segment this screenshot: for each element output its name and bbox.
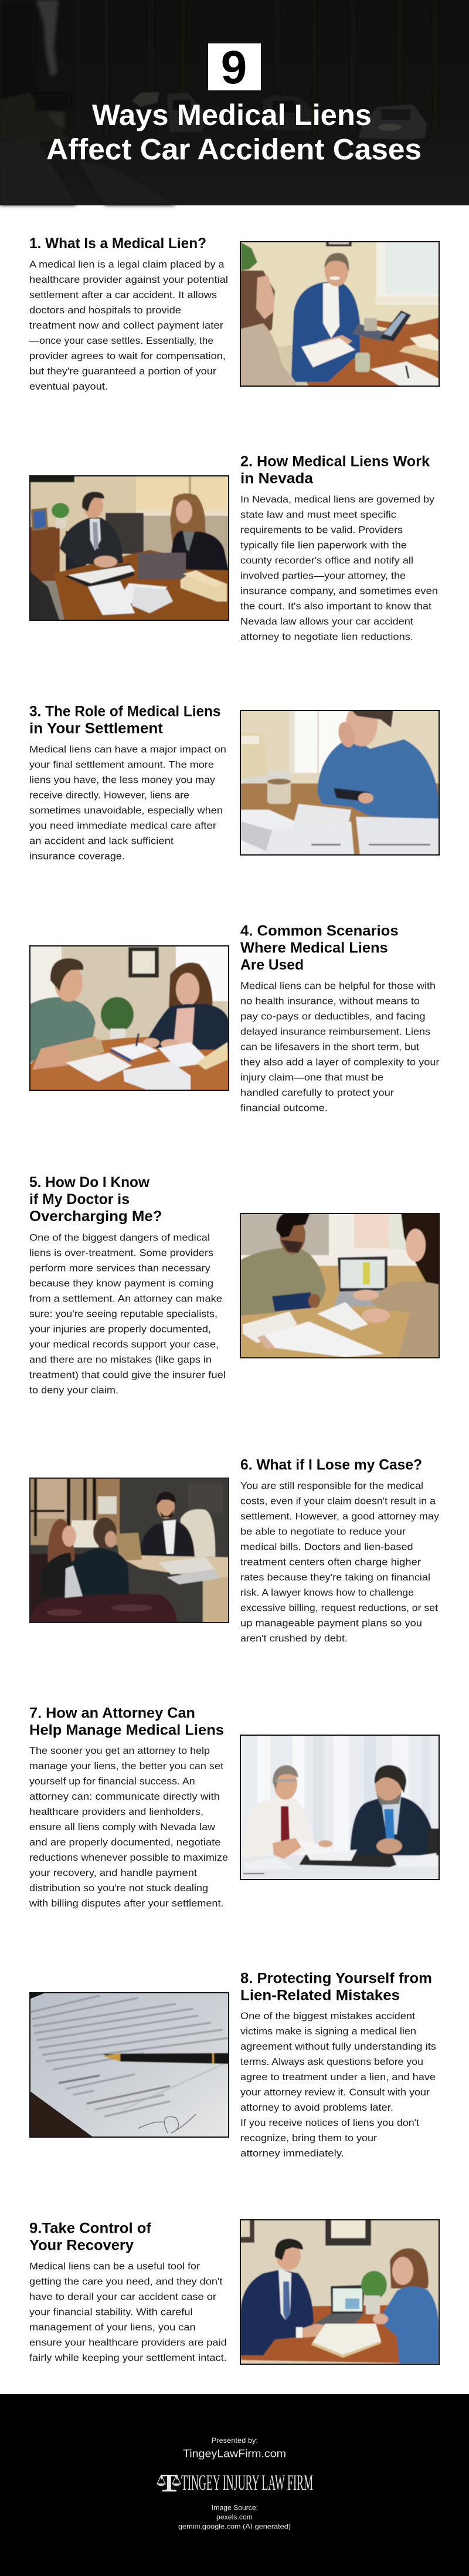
text block 6: up manageable payment plans so you bbox=[240, 1618, 422, 1629]
text block 1: doctors and hospitals to provide bbox=[29, 305, 181, 316]
logo: Tingey Injury Law Firm bbox=[157, 2469, 313, 2496]
text block 2: state law and must meet specific bbox=[240, 510, 396, 520]
heading 8: Lien-Related Mistakes bbox=[240, 1987, 400, 2004]
image sources: Image Source: bbox=[212, 2503, 258, 2511]
heading 9: 9.Take Control of bbox=[29, 2220, 152, 2237]
text block 7: with billing disputes after your settlement. bbox=[29, 1898, 224, 1909]
heading 7 bbox=[29, 1705, 224, 1739]
text block 5: One of the biggest dangers of medical bbox=[29, 1232, 210, 1243]
image sources: pexels.com bbox=[216, 2513, 253, 2521]
text block 1: —once your case settles. Essentially, the bbox=[29, 336, 213, 346]
heading 5 bbox=[29, 1174, 162, 1225]
panel: section 9 take control of your recovery bbox=[29, 2219, 440, 2365]
text block 9: ensure your healthcare providers are paid bbox=[29, 2338, 227, 2348]
photo: contract page with black pen and signature bbox=[29, 1992, 229, 2138]
footer: TINGEY INJURY LAW FIRM bbox=[181, 2471, 313, 2495]
text block 7: distribution so you're not stuck dealing bbox=[29, 1883, 208, 1894]
heading 5: Overcharging Me? bbox=[29, 1208, 162, 1225]
title: Affect Car Accident Cases bbox=[46, 133, 422, 165]
heading 4: Where Medical Liens bbox=[240, 940, 388, 956]
text block 9 bbox=[29, 2261, 227, 2364]
text block 5: your injuries are properly documented, bbox=[29, 1324, 211, 1334]
heading 7: 7. How an Attorney Can bbox=[29, 1705, 195, 1722]
text block 2: requirements to be valid. Providers bbox=[240, 525, 403, 536]
text block 3: insurance coverage. bbox=[29, 851, 125, 862]
text block 6: treatment centers often charge higher bbox=[240, 1557, 422, 1568]
heading 7: Help Manage Medical Liens bbox=[29, 1722, 224, 1739]
photo: couple meeting lawyer at office desk bbox=[29, 1478, 229, 1623]
text block 4: handled carefully to protect your bbox=[240, 1088, 395, 1098]
text block 4: they also add a layer of complexity to your bbox=[240, 1057, 440, 1068]
image sources: gemini.google.com (AI-generated) bbox=[178, 2522, 291, 2530]
text block 8: One of the biggest mistakes accident bbox=[240, 2011, 415, 2021]
text block 4: pay co-pays or deductibles, and facing bbox=[240, 1012, 426, 1022]
panel: section 4 common scenarios bbox=[29, 923, 440, 1114]
text block 6: excessive billing, request reductions, or set bbox=[240, 1603, 438, 1614]
photo: attorney reviewing bills with client with wrist brace bbox=[240, 1213, 440, 1358]
text block 5 bbox=[29, 1232, 226, 1395]
text block 7: reductions whenever possible to maximize bbox=[29, 1852, 228, 1863]
header photo: dark forest road with cars bbox=[0, 0, 469, 205]
text block 8: agree to treatment under a lien, and have bbox=[240, 2072, 436, 2083]
text block 8: attorney to avoid problems later. bbox=[240, 2102, 393, 2113]
text block 3: liens you have, the less money you may bbox=[29, 775, 216, 786]
heading 2 bbox=[240, 454, 430, 487]
footer bbox=[0, 2394, 469, 2576]
text block 3: Medical liens can have a major impact on bbox=[29, 745, 226, 755]
text block 3: an accident and lack sufficient bbox=[29, 836, 174, 847]
panel: section 7 how an attorney can help bbox=[29, 1705, 440, 1909]
text block 2: In Nevada, medical liens are governed by bbox=[240, 495, 435, 505]
number badge: 9 bbox=[221, 41, 247, 93]
heading 4: 4. Common Scenarios bbox=[240, 923, 399, 939]
text block 8: attorney immediately. bbox=[240, 2148, 344, 2159]
text block 1: but they're guaranteed a portion of your bbox=[29, 366, 217, 377]
text block 3: you need immediate medical care after bbox=[29, 821, 217, 831]
panel: section 5 overcharging doctor bbox=[29, 1174, 440, 1395]
panel: section 2 how medical liens work in Nevada bbox=[29, 454, 438, 643]
text block 3: your final settlement amount. The more bbox=[29, 760, 214, 770]
heading 3: in Your Settlement bbox=[29, 721, 164, 737]
text block 5: your medical records support your case, bbox=[29, 1339, 219, 1350]
panel: section 8 protecting yourself bbox=[29, 1970, 436, 2159]
heading 8 bbox=[240, 1970, 432, 2004]
photo: injured client with attorney signing documents bbox=[29, 945, 229, 1091]
heading 2: 2. How Medical Liens Work bbox=[240, 454, 430, 470]
heading 3: 3. The Role of Medical Liens bbox=[29, 703, 220, 719]
text block 1: healthcare provider against your potential bbox=[29, 275, 228, 285]
text block 4: can be lifesavers in the short term, but bbox=[240, 1042, 419, 1053]
text block 6: risk. A lawyer knows how to challenge bbox=[240, 1588, 414, 1598]
heading 5: if My Doctor is bbox=[29, 1191, 130, 1208]
text block 4: delayed insurance reimbursement. Liens bbox=[240, 1027, 430, 1037]
text block 5: treatment) that could give the insurer fuel bbox=[29, 1370, 226, 1380]
text block 2: involved parties—your attorney, the bbox=[240, 571, 406, 582]
text block 8: If you receive notices of liens you don't bbox=[240, 2118, 419, 2128]
text block 7: your recovery, and handle payment bbox=[29, 1868, 197, 1878]
text block 4: financial outcome. bbox=[240, 1103, 328, 1114]
text block 1: provider agrees to wait for compensation, bbox=[29, 351, 226, 361]
text block 4: Medical liens can be helpful for those with bbox=[240, 981, 436, 992]
text block 9: Medical liens can be a useful tool for bbox=[29, 2261, 200, 2272]
text block 7 bbox=[29, 1746, 228, 1909]
text block 3: sometimes unavoidable, especially when bbox=[29, 806, 223, 816]
heading 8: 8. Protecting Yourself from bbox=[240, 1970, 432, 1987]
text block 1: A medical lien is a legal claim placed by a bbox=[29, 259, 225, 270]
text block 2: the court. It's also important to know that bbox=[240, 601, 431, 612]
text block 3: receive directly. However, liens are bbox=[29, 790, 189, 801]
text block 7: healthcare providers and lienholders, bbox=[29, 1807, 203, 1817]
text block 2: county recorder's office and notify all bbox=[240, 556, 413, 566]
text block 5: because they know payment is coming bbox=[29, 1278, 213, 1289]
text block 2: typically file lien paperwork with the bbox=[240, 540, 407, 551]
panel: section 1 what is a medical lien bbox=[29, 235, 440, 392]
text block 7: yourself up for financial success. An bbox=[29, 1776, 195, 1787]
panel: section 3 role of medical liens in settlement bbox=[29, 702, 440, 862]
text block 1: settlement after a car accident. It allows bbox=[29, 290, 217, 300]
heading 9: Your Recovery bbox=[29, 2237, 134, 2253]
photo: two men in white room reviewing paper bbox=[240, 1735, 440, 1880]
panel: section 6 what if I lose my case bbox=[29, 1456, 440, 1644]
text block 6: aren't crushed by debt. bbox=[240, 1634, 348, 1644]
heading 3 bbox=[29, 703, 220, 737]
heading 4: Are Used bbox=[240, 957, 304, 973]
image sources bbox=[178, 2503, 291, 2530]
heading 1: 1. What Is a Medical Lien? bbox=[29, 235, 206, 252]
text block 3 bbox=[29, 745, 226, 862]
text block 4: injury claim—one that must be bbox=[240, 1073, 383, 1083]
icon: scales of justice bbox=[157, 2469, 181, 2496]
heading 4 bbox=[240, 923, 399, 973]
icon: scales of justice: T bbox=[161, 2469, 178, 2496]
text block 5: sure: you're seeing reputable specialists, bbox=[29, 1309, 217, 1319]
presented by: TingeyLawFirm.com bbox=[183, 2447, 286, 2460]
text block 6: medical bills. Doctors and lien-based bbox=[240, 1542, 413, 1553]
text block 5: liens is over-treatment. Some providers bbox=[29, 1248, 213, 1258]
heading 5: 5. How Do I Know bbox=[29, 1174, 150, 1191]
text block 8: recognize, bring them to your bbox=[240, 2133, 378, 2144]
text block 9: have to derail your car accident case or bbox=[29, 2292, 217, 2303]
text block 9: management of your liens, you can bbox=[29, 2323, 196, 2333]
text block 8: terms. Always ask questions before you bbox=[240, 2057, 423, 2067]
text block 5: and there are no mistakes (like gaps in bbox=[29, 1354, 212, 1365]
text block 8: agreement without fully understanding its bbox=[240, 2041, 436, 2052]
text block 6: You are still responsible for the medical bbox=[240, 1481, 423, 1492]
text block 6 bbox=[240, 1481, 440, 1644]
text block 6: be able to negotiate to reduce your bbox=[240, 1527, 406, 1537]
text block 2: insurance company, and sometimes even bbox=[240, 586, 438, 597]
number badge bbox=[208, 41, 261, 93]
text block 2: attorney to negotiate lien reductions. bbox=[240, 632, 413, 643]
photo: attorney in navy suit with client and laptop bbox=[240, 2219, 440, 2365]
text block 4 bbox=[240, 981, 440, 1114]
heading 2: in Nevada bbox=[240, 471, 314, 487]
text block 6: costs, even if your claim doesn't result in a bbox=[240, 1496, 436, 1507]
text block 7: The sooner you get an attorney to help bbox=[29, 1746, 210, 1756]
text block 2 bbox=[240, 495, 438, 643]
text block 7: and are properly documented, negotiate bbox=[29, 1837, 220, 1848]
header banner bbox=[0, 0, 469, 205]
text block 1: eventual payout. bbox=[29, 381, 108, 392]
presented by: Presented by: bbox=[212, 2436, 258, 2445]
text block 7: manage your liens, the better you can set bbox=[29, 1761, 223, 1772]
title: Ways Medical Liens bbox=[92, 99, 372, 131]
text block 9: fairly while keeping your settlement intact. bbox=[29, 2353, 227, 2364]
text block 8 bbox=[240, 2011, 436, 2159]
text block 7: attorney can: communicate directly with bbox=[29, 1791, 220, 1802]
text block 6: rates because they're taking on financial bbox=[240, 1573, 430, 1583]
text block 2: Nevada law allows your car accident bbox=[240, 617, 413, 627]
photo: worried man in blue sweater with bills and phone bbox=[240, 710, 440, 856]
heading 6: 6. What if I Lose my Case? bbox=[240, 1456, 422, 1473]
text block 5: to deny your claim. bbox=[29, 1385, 118, 1395]
text block 4: no health insurance, without means to bbox=[240, 996, 420, 1007]
text block 7: ensure all liens comply with Nevada law bbox=[29, 1822, 215, 1833]
text block 1 bbox=[29, 259, 228, 392]
text block 1: treatment now and collect payment later bbox=[29, 320, 224, 331]
text block 6: settlement. However, a good attorney may bbox=[240, 1512, 440, 1522]
text block 8: your attorney review it. Consult with your bbox=[240, 2087, 430, 2098]
text block 5: from a settlement. An attorney can make bbox=[29, 1293, 222, 1304]
heading 9 bbox=[29, 2220, 152, 2253]
text block 9: your financial stability. With careful bbox=[29, 2307, 193, 2318]
title bbox=[46, 99, 422, 165]
photo: two attorneys at desk with laptop and documents bbox=[29, 475, 229, 621]
text block 8: victims make is signing a medical lien bbox=[240, 2026, 416, 2037]
text block 9: getting the care you need, and they don't bbox=[29, 2277, 223, 2287]
photo: attorney in blue suit with client at table bbox=[240, 241, 440, 387]
presented by bbox=[183, 2436, 286, 2460]
text block 5: perform more services than necessary bbox=[29, 1263, 211, 1273]
